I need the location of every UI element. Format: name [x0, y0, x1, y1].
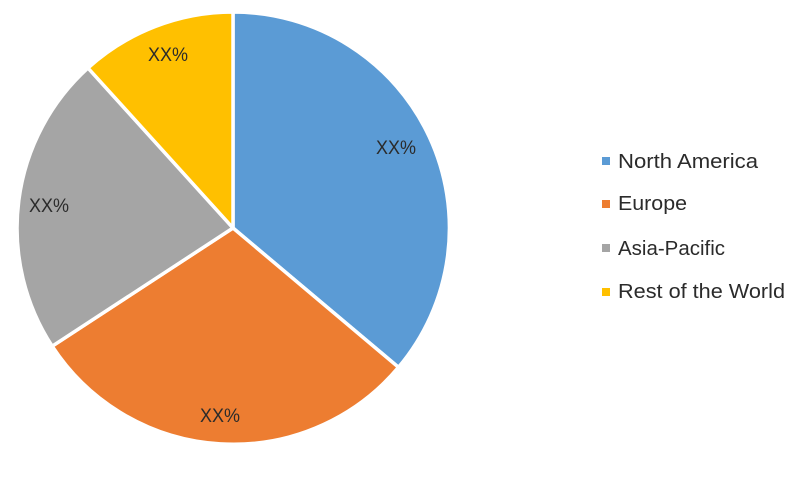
slice: Asia-Pacific [17, 68, 233, 346]
label: Asia-Pacific value: XX% [29, 196, 69, 217]
slice: Rest of the World [88, 12, 233, 228]
legend item: Asia-Pacific: Asia-Pacific [618, 238, 725, 260]
slice: Europe [52, 228, 398, 444]
pie chart [17, 12, 449, 444]
legend item: North America: North America [618, 151, 759, 173]
label: North America value: XX% [376, 138, 416, 159]
legend item: Europe: Europe [618, 193, 687, 215]
data labels [29, 45, 416, 427]
legend [602, 151, 785, 303]
label: Rest of the World value: XX% [148, 45, 188, 66]
legend item: Rest of the World: Rest of the World [618, 281, 785, 303]
slice: North America [233, 12, 449, 367]
label: Europe value: XX% [200, 406, 240, 427]
